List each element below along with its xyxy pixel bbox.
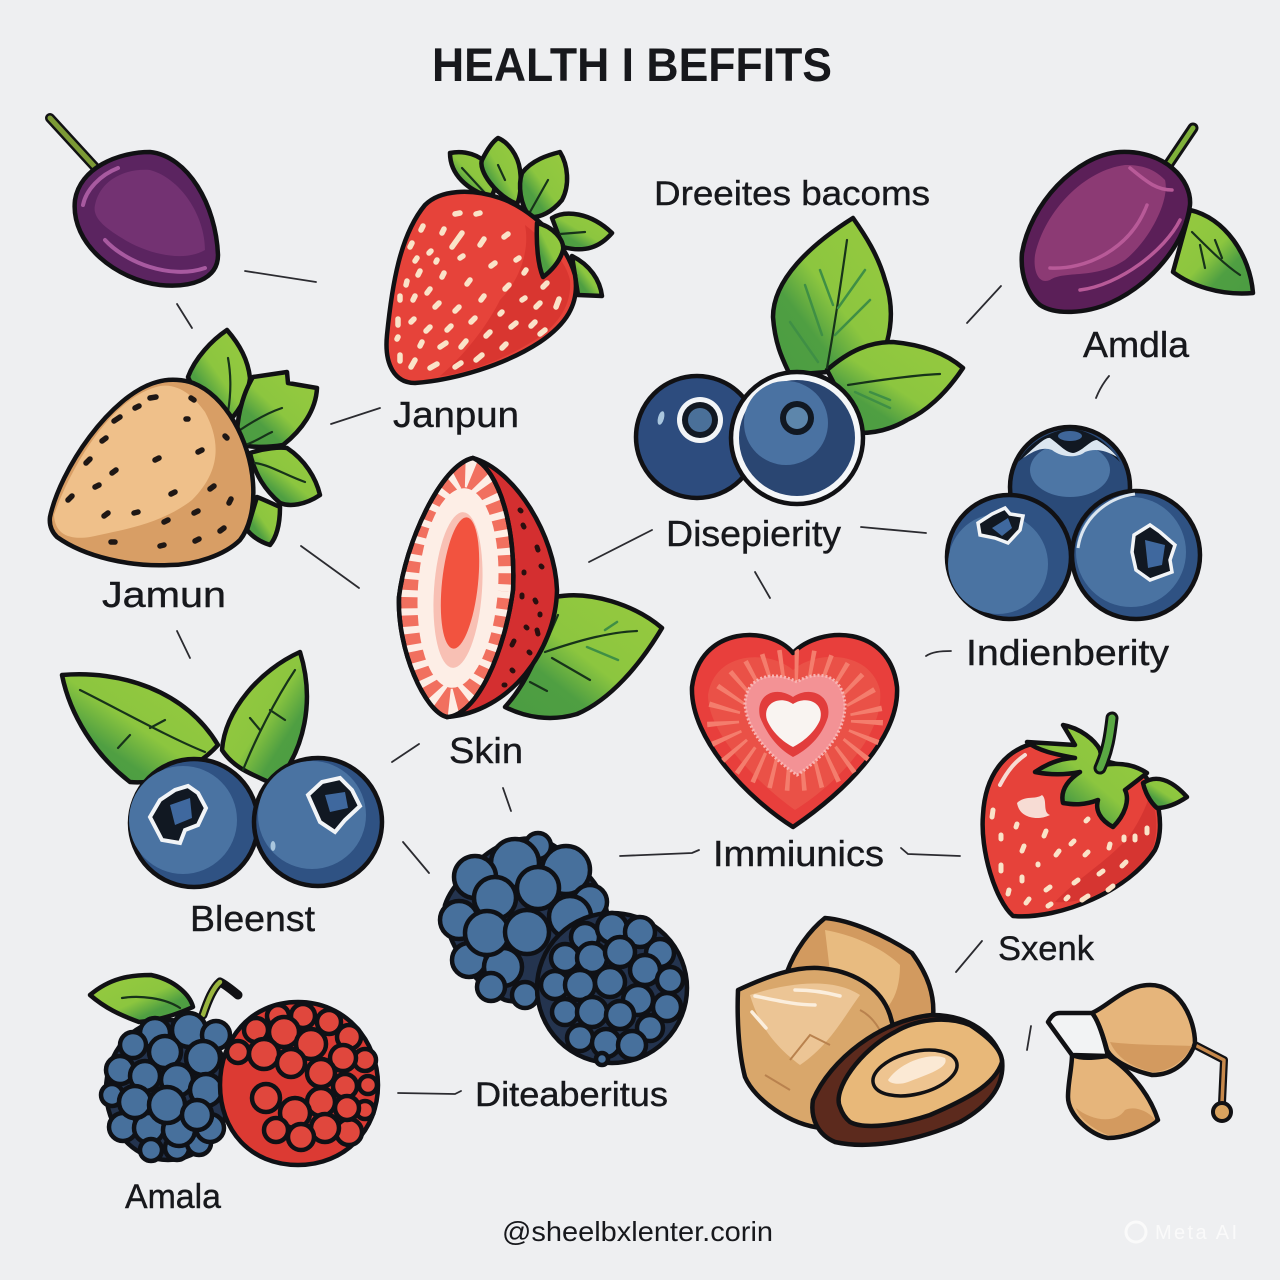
label: Amala: Amala bbox=[125, 1178, 221, 1216]
tan fruit leaves bbox=[188, 330, 320, 545]
halved nut bbox=[812, 1015, 1002, 1145]
left berry bbox=[947, 495, 1071, 619]
front leaf bbox=[537, 223, 563, 277]
icon: plum with leaf top right bbox=[1022, 128, 1253, 312]
icon: plum top left bbox=[50, 118, 218, 286]
icon: large strawberry bbox=[387, 138, 612, 383]
icon: blackberry and raspberry bbox=[90, 975, 378, 1165]
right blueberry bbox=[254, 758, 382, 886]
website credit: @sheelbxlenter.corin bbox=[502, 1216, 773, 1247]
icon: blueberries with leaves left bbox=[62, 652, 382, 887]
leaf upper bbox=[773, 218, 891, 375]
leaf behind bbox=[505, 595, 662, 718]
icon: pods bbox=[1048, 985, 1231, 1138]
left cluster bbox=[440, 833, 608, 1008]
label: Diteaberitus: Diteaberitus bbox=[475, 1076, 668, 1114]
right berry bbox=[1072, 491, 1200, 619]
back nut bbox=[787, 918, 933, 1030]
tan fruit seeds bbox=[68, 397, 231, 546]
connector lines bbox=[177, 271, 1109, 1094]
pink ruffled ring bbox=[745, 675, 845, 775]
seeds bbox=[992, 810, 1147, 906]
label: Bleenst: Bleenst bbox=[190, 898, 315, 939]
label: Dreeites bacoms: Dreeites bacoms bbox=[654, 175, 930, 213]
label: Disepierity: Disepierity bbox=[666, 513, 841, 554]
calyx bbox=[1027, 725, 1147, 827]
tail bbox=[1195, 1045, 1224, 1103]
blueberry front bbox=[731, 372, 863, 504]
blueberry left bbox=[636, 376, 758, 498]
leaf bbox=[90, 975, 193, 1022]
icon: nuts bbox=[738, 918, 1002, 1145]
icon: blackberries bbox=[440, 833, 687, 1065]
icon: tan strawberry bbox=[50, 330, 320, 565]
body bbox=[983, 743, 1160, 916]
label: Amdla: Amdla bbox=[1083, 324, 1190, 365]
strawberry body bbox=[387, 192, 576, 383]
seeds bbox=[397, 213, 559, 368]
label: Immiunics: Immiunics bbox=[713, 833, 884, 874]
raspberry bbox=[220, 1002, 378, 1165]
tan fruit body bbox=[50, 380, 253, 565]
label: Skin: Skin bbox=[449, 730, 523, 771]
icon: heart fruit bbox=[692, 635, 897, 827]
label: Jamun: Jamun bbox=[102, 574, 226, 615]
skin bbox=[447, 458, 557, 717]
back berry bbox=[1010, 427, 1130, 547]
icon: small strawberry right bbox=[983, 718, 1187, 916]
label: Sxenk: Sxenk bbox=[998, 930, 1095, 968]
right cluster bbox=[537, 913, 687, 1065]
icon: blueberries with leaves center bbox=[636, 218, 963, 504]
skin seeds bbox=[504, 510, 542, 685]
strawberry leaves bbox=[450, 138, 612, 296]
front nut bbox=[738, 968, 895, 1128]
lower pod bbox=[1068, 1055, 1158, 1138]
label: Indienberity: Indienberity bbox=[966, 632, 1169, 673]
leaf right bbox=[827, 342, 963, 433]
label: Janpun: Janpun bbox=[393, 394, 519, 435]
blackberry bbox=[101, 1013, 230, 1161]
icon: three blueberries bbox=[947, 427, 1200, 619]
left blueberry bbox=[130, 759, 258, 887]
stem bbox=[203, 982, 238, 1015]
upper pod bbox=[1092, 985, 1195, 1075]
icon: cut strawberry with leaf bbox=[399, 458, 662, 718]
shell bbox=[1048, 1013, 1108, 1056]
cut face bbox=[399, 458, 513, 717]
watermark: Meta AI: Meta AI bbox=[1155, 1222, 1237, 1244]
title: HEALTH I BEFFITS bbox=[432, 38, 832, 91]
white heart core bbox=[766, 700, 821, 747]
